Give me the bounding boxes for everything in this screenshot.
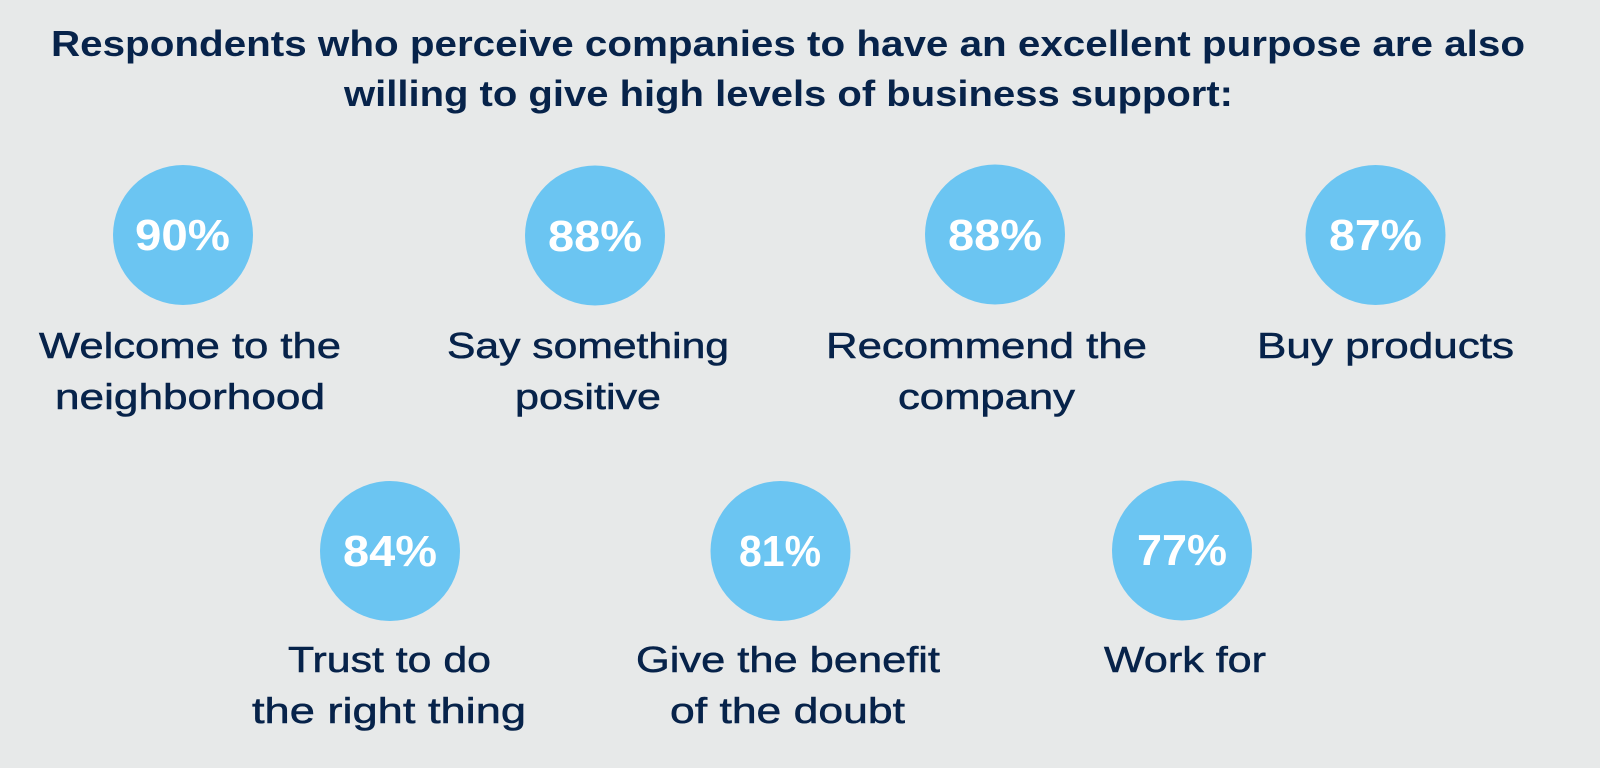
circle: 87%	[1306, 165, 1446, 305]
circle: 84%	[320, 481, 460, 621]
label: say something positive: Say something	[447, 325, 729, 366]
stat: 81% give the benefit of the doubt	[636, 481, 940, 731]
circle: 88%: 88%	[948, 211, 1042, 260]
label: trust to do the right thing: the right thing	[252, 690, 526, 731]
label: recommend the company: company	[898, 376, 1075, 417]
circle: 77%	[1112, 480, 1252, 620]
circle: 77%: 77%	[1137, 526, 1227, 575]
label: give the benefit of the doubt	[636, 639, 940, 731]
label: trust to do the right thing: Trust to do	[288, 639, 491, 680]
label: give the benefit of the doubt: Give the benefit	[636, 639, 940, 680]
circle: 87%: 87%	[1329, 211, 1422, 260]
title: willing to give high levels of business support:	[343, 73, 1233, 114]
circle: 88%: 88%	[548, 212, 642, 261]
circle: 90%	[113, 165, 253, 305]
stat: 88% say something positive	[447, 166, 729, 417]
label: say something positive	[447, 325, 729, 417]
label: recommend the company: Recommend the	[826, 325, 1147, 366]
circle: 84%: 84%	[343, 527, 437, 576]
stat: 84% trust to do the right thing	[252, 481, 526, 731]
circle: 90%: 90%	[135, 211, 230, 260]
label: say something positive: positive	[515, 376, 661, 417]
stat: 90% welcome to the neighborhood	[39, 165, 341, 417]
stat: 88% recommend the company	[826, 164, 1147, 417]
label: trust to do the right thing	[252, 639, 526, 731]
circle: 88%	[525, 166, 665, 306]
title	[51, 23, 1525, 114]
label: welcome to the neighborhood	[39, 325, 341, 417]
circle: 88%	[925, 164, 1065, 304]
label: give the benefit of the doubt: of the doubt	[670, 690, 905, 731]
circle: 81%	[710, 481, 850, 621]
label: welcome to the neighborhood: neighborhood	[55, 376, 325, 417]
stat: 77% work for	[1104, 480, 1266, 680]
circle: 81%: 81%	[739, 527, 821, 576]
label: buy products: Buy products	[1257, 325, 1514, 366]
title: Respondents who perceive companies to have an excellent purpose are also	[51, 23, 1525, 64]
label: welcome to the neighborhood: Welcome to the	[39, 325, 341, 366]
stat: 87% buy products	[1257, 165, 1514, 366]
label: work for: Work for	[1104, 639, 1266, 680]
label: recommend the company	[826, 325, 1147, 417]
